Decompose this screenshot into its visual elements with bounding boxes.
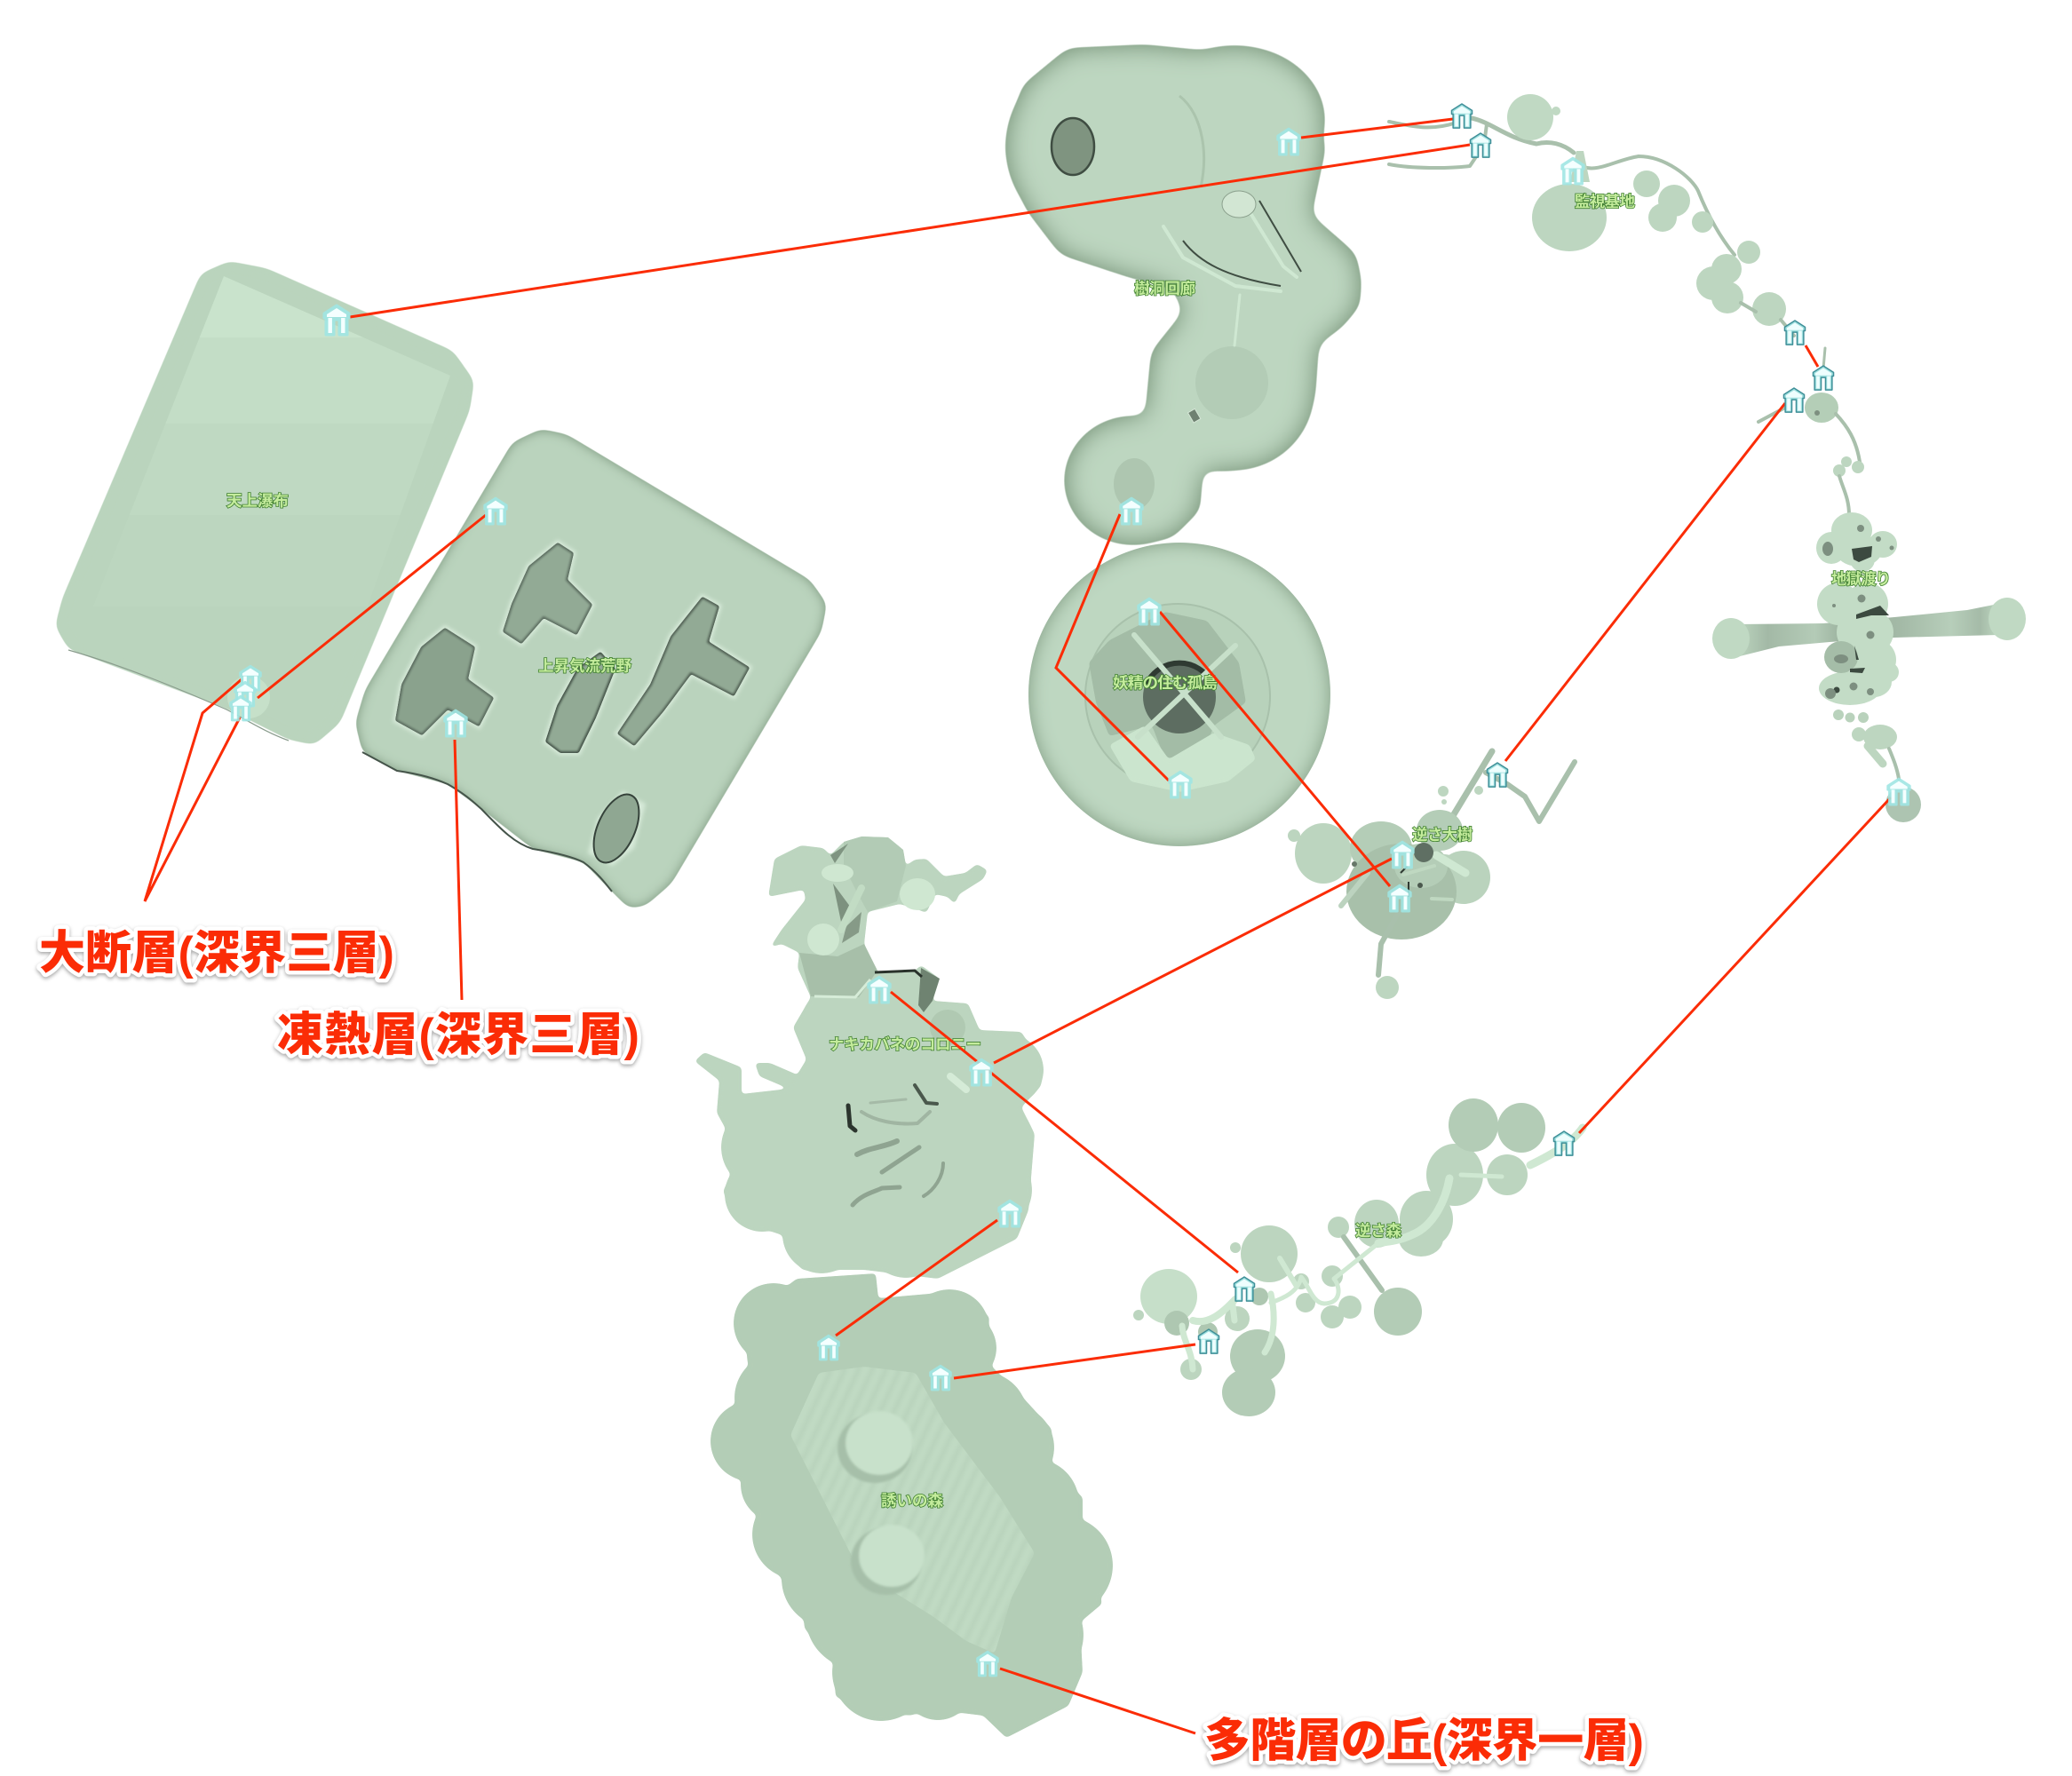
icon: pin 誘いの森 bottom	[977, 1652, 998, 1676]
panel: 逆さ森 region	[1133, 1098, 1583, 1416]
label: 逆さ森: 逆さ森	[1355, 1222, 1401, 1240]
label: 誘いの森: 誘いの森	[881, 1492, 943, 1510]
icon: pin chain start lower	[1470, 133, 1491, 157]
trenches	[848, 1085, 943, 1205]
hole: bottom	[584, 788, 648, 869]
hole: centre	[546, 653, 615, 752]
icon: pin コロニー top	[869, 977, 890, 1003]
label: 地獄渡り: 地獄渡り	[1831, 570, 1891, 588]
icon: pin 樹洞回廊 top	[1278, 129, 1299, 155]
location pins	[230, 104, 1909, 1676]
icon: pin コロニー right	[971, 1059, 992, 1085]
panel: 天上瀑布 region	[53, 258, 480, 745]
icon: pin 逆さ大樹 lower	[1389, 885, 1410, 911]
hole: upper	[504, 543, 591, 643]
icon: pin 逆さ大樹 upper	[1392, 842, 1413, 868]
mound lower	[851, 1525, 925, 1595]
central pit	[1143, 661, 1216, 733]
lighter forest floor	[790, 1367, 1035, 1653]
dark pit	[1052, 118, 1094, 175]
light terrain	[1109, 725, 1256, 792]
panel: 上昇気流荒野 region	[355, 429, 827, 908]
heading: 大断層: 大断層(深界三層)	[39, 928, 394, 979]
label: 監視基地: 監視基地	[1575, 193, 1636, 210]
upper lobe shading	[799, 944, 877, 997]
panel: 地獄渡り chain	[1712, 348, 2026, 822]
heading: 多階層の丘: 多階層の丘(深界一層)	[1204, 1716, 1644, 1767]
panel: 逆さ大樹 region	[1288, 751, 1575, 999]
label: 上昇気流荒野: 上昇気流荒野	[538, 657, 632, 675]
red connector lines	[145, 119, 1891, 1733]
icon: pin 上昇気流荒野 top	[485, 498, 506, 524]
icon: pin 監視基地	[1562, 158, 1584, 184]
icon: pin chain mid lower	[1813, 366, 1834, 390]
icon: pin 天上瀑布 trio top	[240, 666, 261, 690]
cross arms	[1736, 604, 1998, 657]
label: 妖精の住む孤島: 妖精の住む孤島	[1113, 674, 1218, 692]
panel: 監視基地 chain	[1389, 94, 1794, 336]
icon: pin 逆さ森 right	[1553, 1131, 1575, 1155]
icon: pin 逆さ大樹 upper right	[1487, 763, 1508, 787]
icon: pin chain start upper	[1451, 104, 1473, 128]
panel: 樹洞回廊 region	[1004, 44, 1361, 545]
panel: 妖精の住む孤島 region	[1028, 543, 1330, 846]
icon: pin chain mid left	[1783, 388, 1805, 412]
icon: pin 孤島 top	[1139, 599, 1160, 624]
crack and ledge	[918, 968, 940, 1012]
heading: 凍熱層: 凍熱層(深界三層)	[277, 1010, 639, 1061]
icon: pin 天上瀑布 top	[324, 305, 349, 335]
icon: pin 上昇気流荒野 bottom	[445, 710, 466, 736]
label: 逆さ大樹: 逆さ大樹	[1412, 826, 1473, 844]
hole: left	[396, 629, 493, 734]
icon: pin 逆さ森 middle	[1234, 1277, 1255, 1301]
icon: pin 孤島 bottom	[1170, 772, 1191, 797]
icon: pin 誘いの森 upper right	[930, 1366, 951, 1390]
label: 天上瀑布: 天上瀑布	[226, 492, 289, 510]
icon: pin 地獄渡り bottom	[1888, 779, 1909, 805]
icon: pin 樹洞回廊 bottom	[1121, 498, 1142, 524]
icon: pin 逆さ森 left	[1198, 1329, 1219, 1353]
icon: pin 誘いの森 upper left	[818, 1336, 839, 1360]
hole: right	[618, 598, 749, 745]
label: ナキカバネのコロニー: ナキカバネのコロニー	[829, 1035, 981, 1053]
panel: ナキカバネのコロニー region	[695, 836, 1044, 1279]
panel: 誘いの森 region	[711, 1273, 1113, 1738]
icon: pin コロニー bottom	[999, 1201, 1020, 1226]
icon: pin 天上瀑布 trio middle	[234, 682, 256, 706]
dark terrain	[1089, 612, 1246, 759]
icon: pin 天上瀑布 trio bottom	[230, 696, 251, 720]
icon: pin chain mid upper	[1784, 321, 1806, 345]
label: 樹洞回廊: 樹洞回廊	[1134, 280, 1195, 297]
mound upper	[838, 1411, 913, 1483]
